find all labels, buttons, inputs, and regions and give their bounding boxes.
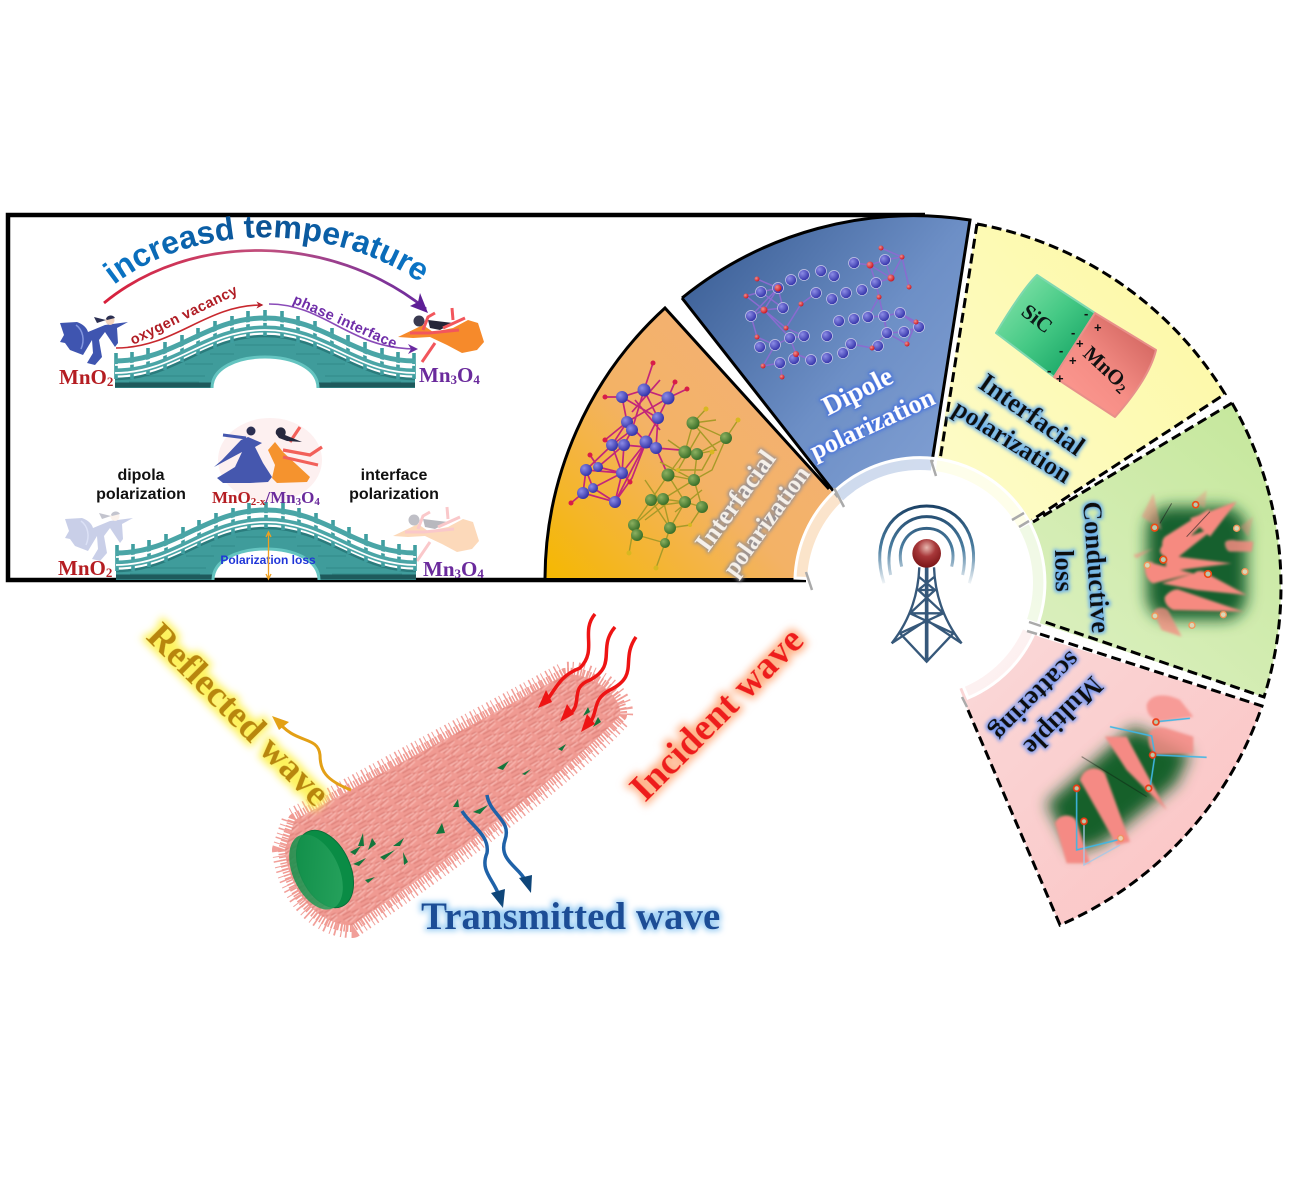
label MnO2: MnO xyxy=(1079,341,1130,391)
dashed edges xyxy=(1033,403,1281,697)
sector xyxy=(545,308,920,578)
fan: yellow interfacial panel xyxy=(920,224,1225,583)
label SiC: SiC xyxy=(1017,299,1057,338)
charges: - xyxy=(1047,363,1051,378)
charges: + xyxy=(1056,371,1064,386)
title: increasd temperature: increasd temperature xyxy=(102,216,426,284)
label: dipola polarization: polarization xyxy=(96,486,186,503)
label: polarization loss: Polarization loss xyxy=(220,553,316,567)
label: Conductive: Conductive xyxy=(1077,500,1116,634)
man head xyxy=(246,426,256,436)
bonds xyxy=(571,363,687,503)
label: Transmitted wave: Transmitted wave xyxy=(421,895,720,938)
label: MnO2-x/Mn3O4: O xyxy=(301,488,314,507)
dashed edges xyxy=(968,634,1262,925)
bonds xyxy=(746,248,919,377)
label: MnO2-x/Mn3O4: MnO xyxy=(212,488,251,507)
atoms red xyxy=(744,246,918,380)
label: polarization (yellow): polarization xyxy=(948,393,1078,490)
dark edge xyxy=(1082,757,1147,797)
label: interface polarization: polarization xyxy=(349,486,439,503)
figure: blue MnO2 xyxy=(60,315,128,365)
arrow: reflected wave xyxy=(277,720,351,790)
white disc xyxy=(807,470,1033,696)
label: MnO2-x/Mn3O4: /Mn xyxy=(264,488,296,507)
arrowhead: reflected xyxy=(272,716,289,730)
sector edges xyxy=(682,216,970,497)
cover under frame xyxy=(806,583,866,613)
phase interface label: phase interface xyxy=(290,292,400,352)
woman sashes xyxy=(283,427,322,465)
label: MnO2 lower: 2 xyxy=(106,565,112,580)
green flecks xyxy=(350,707,601,883)
atoms blue xyxy=(746,254,924,368)
label: Mn3O4: 3 xyxy=(450,372,458,387)
arrow: polarization loss xyxy=(266,532,271,579)
fan labels xyxy=(689,361,1116,762)
label: Mn3O4: 4 xyxy=(473,372,480,387)
label: Mn3O4: O xyxy=(457,363,473,387)
fan: orange interfacial panel xyxy=(545,308,920,578)
dashed edges xyxy=(940,224,1225,520)
bridge scene: bottom row xyxy=(58,418,484,581)
label: Interfacial (orange): Interfacial xyxy=(689,445,782,557)
label: Interfacial (yellow): Interfacial xyxy=(974,367,1091,462)
MnO2 half xyxy=(1054,313,1156,417)
bridge upper xyxy=(115,310,415,388)
sector xyxy=(920,403,1281,697)
label: Mn3O4: Mn xyxy=(419,363,450,387)
substrate xyxy=(1147,507,1247,620)
label: Incident wave: Incident wave xyxy=(622,619,812,809)
label: MnO2-x/Mn3O4: 3 xyxy=(296,496,302,508)
scattered paths xyxy=(1077,718,1207,850)
bonds green xyxy=(629,409,738,568)
arrow: incident waves xyxy=(546,614,636,727)
sector xyxy=(920,224,1225,583)
crystal structure xyxy=(568,360,740,570)
atoms green xyxy=(628,416,732,548)
halo xyxy=(218,418,322,502)
charges: + xyxy=(1094,320,1102,335)
long needle fringe xyxy=(285,675,620,925)
center couple xyxy=(214,418,322,502)
multiple scattering rods xyxy=(1047,695,1207,865)
label: MnO2-x/Mn3O4: 4 xyxy=(314,496,320,508)
dots xyxy=(1151,502,1211,577)
ring boundary ticks xyxy=(806,460,1041,707)
fan: green conductive panel xyxy=(920,403,1281,697)
faded dots xyxy=(1144,525,1248,628)
woman hair xyxy=(276,427,302,442)
center ring and disc xyxy=(795,458,1045,707)
charges: - xyxy=(1084,306,1088,321)
atoms red xyxy=(568,360,690,506)
dots xyxy=(1074,719,1159,824)
arrowheads: incident xyxy=(538,690,595,732)
ball xyxy=(912,539,941,568)
SiC half xyxy=(996,275,1095,377)
sector xyxy=(920,583,1262,925)
label: scattering: scattering xyxy=(985,646,1087,748)
arrow: transmitted waves xyxy=(462,795,525,893)
arrow: increased temperature xyxy=(104,250,428,313)
label: MnO2: MnO xyxy=(59,365,107,389)
label: dipola polarization: dipola xyxy=(117,467,165,484)
rod: nanoneedle coated SiC fibre xyxy=(278,675,620,925)
panel border xyxy=(8,215,925,580)
fan: blue dipole panel xyxy=(682,216,970,583)
label: Dipole: Dipole xyxy=(817,361,898,421)
translucent ring xyxy=(795,458,1045,698)
label: Mn3O4 lower: O xyxy=(461,557,477,581)
charges: + xyxy=(1076,336,1084,351)
short needle fringe xyxy=(285,675,620,925)
tower lattice xyxy=(892,567,962,662)
cones xyxy=(1055,695,1193,863)
faded dot xyxy=(1118,835,1124,841)
label: MnO2 lower: MnO xyxy=(58,556,106,580)
signal arcs xyxy=(880,506,974,583)
label: Mn3O4 lower: 4 xyxy=(477,566,484,581)
conductive nanorods xyxy=(1133,490,1253,637)
label: polarization (orange): polarization xyxy=(718,461,816,582)
atoms blue xyxy=(577,384,674,508)
faded path xyxy=(1084,822,1120,865)
tower mast xyxy=(921,567,932,662)
bridge scene: top row xyxy=(59,216,484,389)
fibre body xyxy=(285,675,620,925)
SiC/MnO2 rod xyxy=(996,275,1156,417)
bridge lower xyxy=(116,502,416,580)
man xyxy=(214,437,272,483)
faded figure orange xyxy=(393,507,479,561)
charges: - xyxy=(1071,325,1075,340)
oxygen vacancy arrow xyxy=(116,305,262,348)
cones xyxy=(1133,490,1253,637)
figure: orange Mn3O4 xyxy=(398,308,484,362)
label: interface polarization: interface xyxy=(361,467,427,484)
frame: left bordered panel xyxy=(8,215,1008,580)
icon: radio tower xyxy=(880,506,974,662)
charges: - xyxy=(1059,343,1063,358)
dark shadow xyxy=(1160,503,1210,537)
fan: pink multiple scattering panel xyxy=(920,583,1262,925)
crystal structure xyxy=(744,246,924,380)
woman xyxy=(268,442,310,483)
label: polarization (blue): polarization xyxy=(805,382,940,465)
label: MnO2: 2 xyxy=(107,374,113,389)
green end cap xyxy=(285,821,365,917)
sector edges xyxy=(545,308,829,578)
phase interface arrowhead xyxy=(408,344,418,354)
oxygen vacancy label: oxygen vacancy xyxy=(128,283,240,349)
end face xyxy=(278,826,354,918)
sector xyxy=(682,216,970,583)
label: loss: loss xyxy=(1049,550,1080,592)
atoms small xyxy=(626,406,740,570)
faded figure blue xyxy=(65,511,133,561)
label MnO2: 2 xyxy=(1112,382,1128,398)
label: Mn3O4 lower: 3 xyxy=(454,566,462,581)
man streamer xyxy=(223,435,246,438)
label: Reflected wave: Reflected wave xyxy=(139,615,338,814)
label: Multiple: Multiple xyxy=(1018,671,1109,762)
phase interface arrow xyxy=(269,304,416,349)
charges: + xyxy=(1069,353,1077,368)
label: MnO2-x/Mn3O4: 2-x xyxy=(251,496,266,508)
substrate xyxy=(1047,727,1190,853)
arrowheads: transmitted xyxy=(491,875,532,908)
label: Mn3O4 lower: Mn xyxy=(423,557,454,581)
